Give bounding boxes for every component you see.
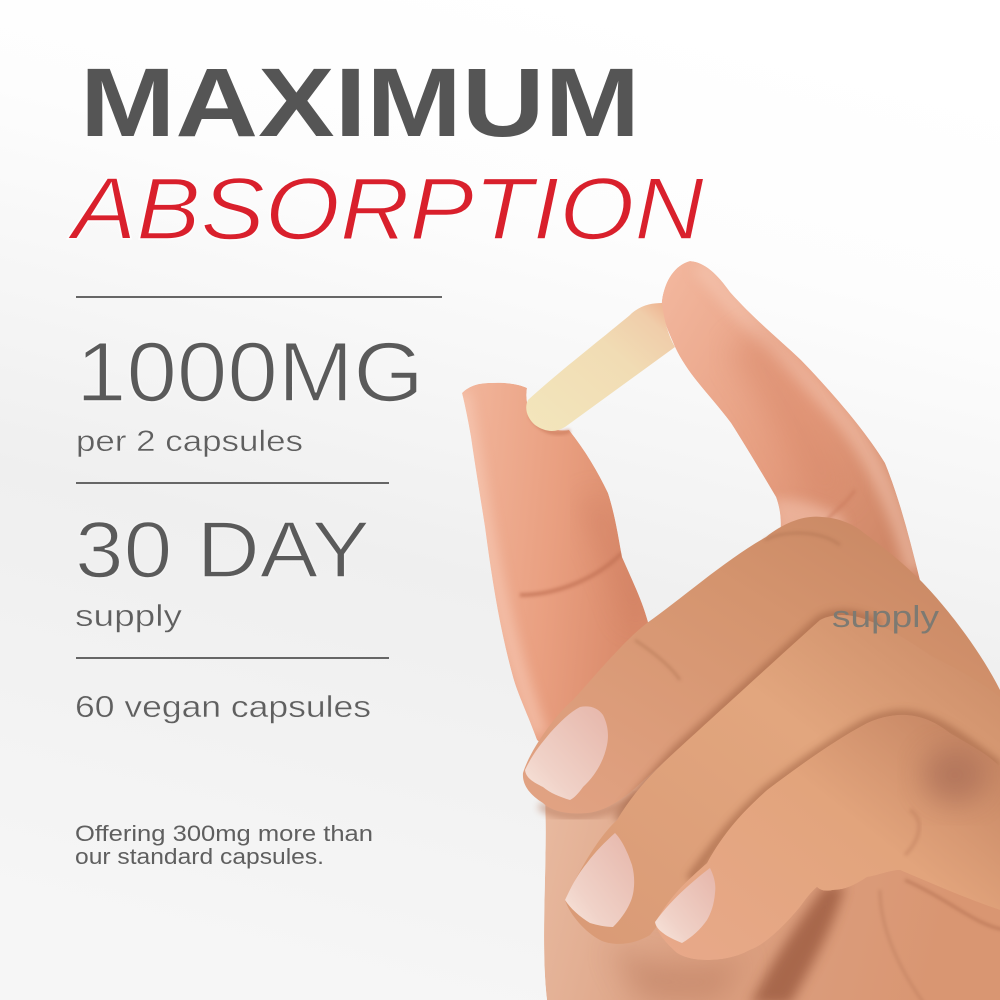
capsule contact shadow <box>530 415 570 433</box>
knuckle wrinkles on lower finger <box>635 533 840 680</box>
hand: middle finger <box>565 615 1000 944</box>
stray label on hand: supply <box>832 599 940 634</box>
stat: 30 day <box>75 505 370 633</box>
capsule <box>526 303 675 433</box>
thumb crease <box>520 553 622 595</box>
footnote <box>75 821 373 869</box>
capsule count: 60 vegan capsules <box>75 689 371 724</box>
divider 1 <box>76 296 442 298</box>
hand: index finger <box>662 261 920 580</box>
title line 1: MAXIMUM <box>80 48 640 157</box>
shadow under lower finger <box>540 795 640 815</box>
hand: front finger <box>655 715 1000 960</box>
hand: thumb <box>462 383 648 760</box>
title <box>67 48 704 258</box>
stat: 1000MG <box>76 325 424 458</box>
shadow on middle finger from front finger <box>690 715 1000 880</box>
stat value: 30 DAY <box>75 505 370 594</box>
nail: upper finger <box>525 706 608 800</box>
shadow on lower finger from middle finger <box>617 615 880 820</box>
hand: lower finger <box>523 517 1000 813</box>
title line 2: ABSORPTION <box>67 159 704 258</box>
footnote line 2: our standard capsules. <box>75 844 324 869</box>
nail: front finger <box>655 868 715 943</box>
footnote line 1: Offering 300mg more than <box>75 821 373 846</box>
stat value: 1000MG <box>76 325 424 419</box>
capsule body <box>526 303 675 431</box>
hand holding capsule <box>462 261 1000 1000</box>
hand: palm <box>544 746 1000 1000</box>
stat label: per 2 capsules <box>76 425 303 458</box>
stat label: supply <box>75 598 183 633</box>
nail: middle finger <box>565 833 634 927</box>
divider 3 <box>76 657 389 659</box>
divider 2 <box>76 482 389 484</box>
